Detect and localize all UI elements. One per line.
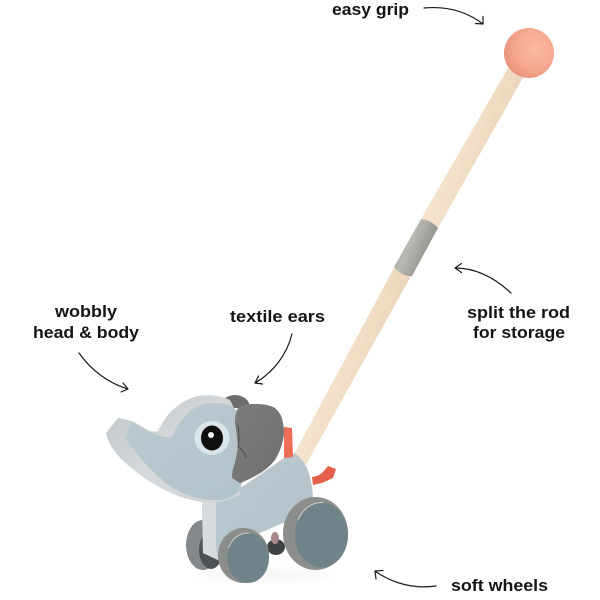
wheel: front right [283, 497, 348, 570]
label: wobbly head and body [33, 303, 140, 342]
body: side edge [202, 500, 218, 560]
label: split the rod for storage: for storage [473, 324, 565, 342]
push rod [292, 28, 554, 470]
tail [312, 466, 336, 485]
body [202, 453, 313, 560]
rear leg gap detail [271, 532, 279, 544]
rod: handle ball [504, 28, 554, 78]
rod: upper section [421, 68, 525, 228]
near ear [232, 404, 284, 483]
arrow: split the rod [455, 264, 511, 293]
toy elephant [106, 395, 348, 583]
label: textile ears: textile ears [230, 308, 325, 326]
label: soft wheels: soft wheels [451, 577, 548, 595]
arrow: soft wheels [375, 570, 436, 587]
wheel: front left [218, 528, 269, 583]
far ear [225, 395, 250, 408]
ground shadow [200, 570, 330, 580]
label: easy grip: easy grip [332, 1, 409, 19]
wheel: rear left [186, 520, 223, 570]
wheel: rear right hidden [267, 539, 285, 555]
label: split the rod for storage: split the rod [467, 304, 570, 322]
tag [284, 427, 293, 458]
arrow: easy grip [424, 8, 483, 24]
label: split the rod for storage [467, 304, 570, 342]
rod: connector sleeve [394, 219, 438, 276]
head: face [125, 403, 248, 500]
eye [194, 421, 230, 455]
label: wobbly head and body: head & body [33, 324, 140, 342]
arrow: textile ears [255, 334, 292, 384]
head: side edge [106, 395, 240, 503]
label: wobbly head and body: wobbly [54, 303, 118, 321]
rod: lower section [292, 266, 411, 470]
arrow: wobbly head and body [79, 353, 128, 392]
ear fold [238, 425, 246, 458]
